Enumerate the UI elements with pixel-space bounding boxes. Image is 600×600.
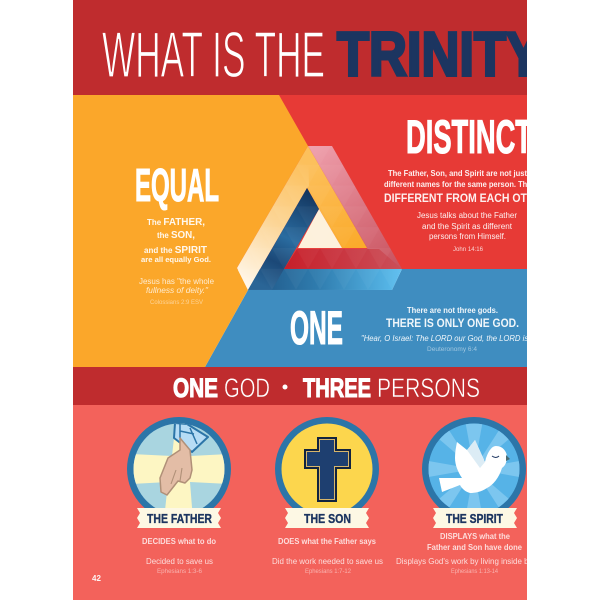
triangle: orange left arm	[237, 146, 309, 290]
band: one god three persons: ONE	[173, 373, 218, 403]
panel: one text	[290, 307, 527, 352]
ribbon: the father	[137, 508, 221, 528]
ribbon: the son: THE SON	[304, 511, 351, 526]
icon: father hand	[127, 417, 231, 508]
text: son role: DOES what the Father says	[278, 537, 377, 546]
triangle: pink arm	[308, 146, 402, 269]
triangle: blue left arm	[248, 188, 319, 290]
text: equal description: and the SPIRIT	[144, 245, 207, 256]
text: distinct quote	[417, 211, 517, 253]
text: distinct description: different names for the same person. They are	[384, 180, 550, 189]
panel: distinct text	[384, 120, 527, 251]
band: one god three persons: PERSONS	[377, 373, 480, 403]
panel: equal background	[73, 95, 308, 367]
text: distinct quote: persons from Himself.	[429, 232, 506, 241]
panel: one background	[205, 269, 527, 367]
triangle: cream centre	[298, 209, 342, 248]
text: father role: Ephesians 1:3-6	[157, 569, 203, 575]
band: one god three persons: GOD	[224, 373, 270, 403]
text: equal description: the SON,	[157, 230, 195, 241]
panel: equal text	[135, 159, 219, 306]
panel: distinct background	[237, 95, 527, 270]
ribbon: the spirit: THE SPIRIT	[446, 511, 503, 526]
text: spirit role: Father and Son have done	[427, 543, 523, 552]
title: what is the: WHAT IS THE	[102, 18, 325, 91]
heading: equal: EQUAL	[135, 159, 219, 211]
text: father role: DECIDES what to do	[142, 537, 216, 546]
text: son role: Ephesians 1:7-12	[305, 569, 352, 575]
text: equal quote: fullness of deity."	[146, 286, 209, 295]
person: the father	[127, 417, 231, 575]
ribbon: the father: THE FATHER	[147, 511, 212, 526]
triangle: facet texture	[237, 146, 402, 290]
text: distinct description: DIFFERENT FROM EACH OTHER.	[384, 191, 552, 205]
text: one description	[362, 307, 527, 352]
text: spirit role: Ephesians 1:13-14	[451, 569, 499, 575]
text: father role	[142, 537, 216, 575]
text: spirit role: DISPLAYS what the	[440, 532, 511, 541]
text: equal description: are all equally God.	[141, 255, 211, 264]
band: one god three persons: THREE	[303, 373, 371, 403]
text: spirit role	[396, 532, 556, 575]
text: son role	[272, 537, 383, 575]
text: one description: Deuteronomy 6:4	[427, 347, 478, 353]
text: distinct quote: and the Spirit as different	[422, 222, 513, 231]
text: equal description: The FATHER,	[147, 217, 205, 228]
heading: one: ONE	[290, 301, 343, 354]
text: father role: Decided to save us	[146, 557, 213, 566]
icon: cross	[275, 417, 379, 508]
icon: dove	[422, 417, 526, 508]
text: one description: "Hear, O Israel: The LORD our God, the LORD is one."	[361, 334, 549, 343]
trinity triangle diagram	[237, 146, 402, 290]
page number: 42	[92, 574, 101, 583]
ribbon: the spirit	[433, 508, 517, 528]
triangle: red arm	[284, 249, 402, 269]
title band	[73, 0, 541, 95]
person: the spirit	[396, 417, 527, 574]
triangle: blue bottom strip	[248, 269, 402, 290]
person: the son	[272, 417, 383, 575]
ribbon: the son	[285, 508, 369, 528]
text: equal quote: Jesus has "the whole	[139, 277, 215, 286]
text: spirit role: Displays God's work by living inside believers	[396, 557, 556, 566]
text: son role: Did the work needed to save us	[272, 557, 383, 566]
text: distinct quote: John 14:16	[453, 247, 484, 253]
text: distinct quote: Jesus talks about the Father	[417, 211, 517, 220]
text: equal quote: Colossians 2:9 ESV	[150, 300, 203, 306]
text: equal quote	[139, 278, 214, 304]
text: one description: THERE IS ONLY ONE GOD.	[386, 316, 519, 330]
band: one god three persons	[73, 367, 527, 405]
text: distinct description	[384, 170, 527, 202]
triangle: orange right arm	[306, 146, 367, 248]
text: one description: There are not three gods.	[407, 306, 498, 315]
text: equal description	[141, 217, 211, 264]
panel: persons background	[73, 405, 527, 600]
text: distinct description: The Father, Son, and Spirit are not just	[388, 169, 527, 178]
title: trinity: TRINITY	[337, 20, 541, 90]
